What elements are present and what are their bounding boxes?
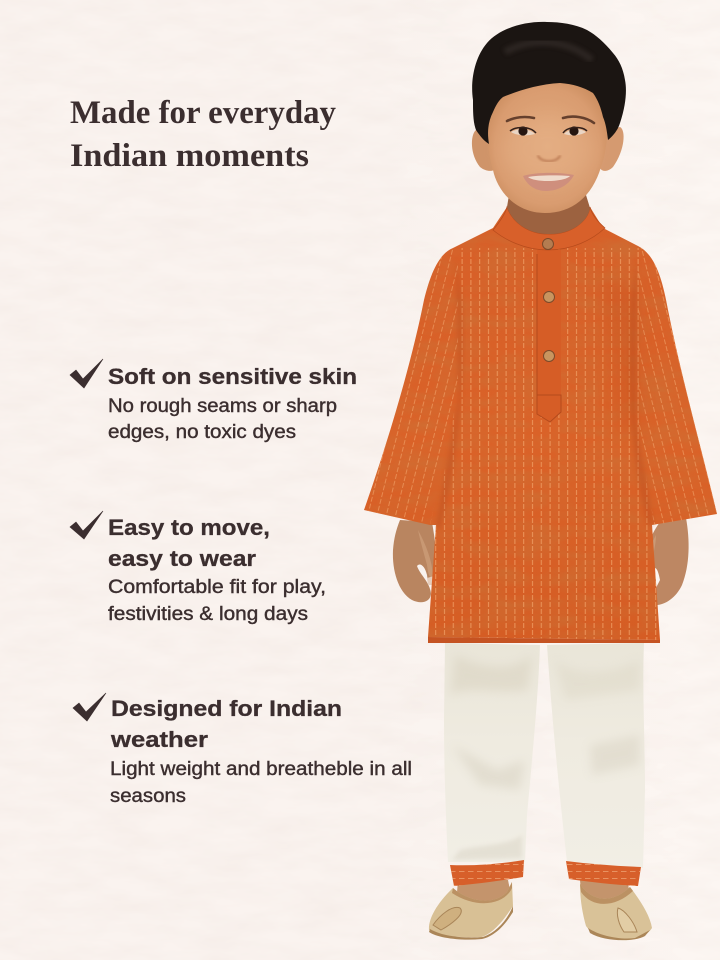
mouth bbox=[523, 173, 574, 191]
ears bbox=[472, 127, 624, 171]
nose bbox=[538, 156, 560, 161]
hands bbox=[393, 518, 689, 605]
benefit: soft on sensitive skin bbox=[70, 359, 357, 443]
benefit: designed for Indian weather: Designed for Indian bbox=[111, 696, 342, 721]
face bbox=[487, 80, 607, 213]
benefit: designed for Indian weather: Light weight and breatheble in all bbox=[110, 759, 412, 780]
hair bbox=[472, 22, 626, 144]
head bbox=[472, 22, 626, 234]
benefit: easy to move: Comfortable fit for play, bbox=[108, 577, 326, 598]
pants bbox=[444, 643, 645, 886]
icon: check mark bbox=[70, 359, 103, 388]
benefit: easy to move bbox=[70, 511, 326, 625]
eyes bbox=[510, 126, 587, 136]
kurta bbox=[364, 207, 717, 643]
benefit: designed for Indian weather: seasons bbox=[110, 786, 186, 807]
shoes bbox=[429, 880, 652, 940]
eyebrows bbox=[507, 117, 594, 123]
pant cuffs bbox=[450, 860, 641, 886]
collar bbox=[493, 207, 605, 250]
heading: Made for everyday bbox=[70, 95, 336, 131]
neck bbox=[507, 195, 590, 234]
benefit: soft on sensitive skin: Soft on sensitive skin bbox=[108, 364, 357, 389]
buttons bbox=[542, 238, 554, 362]
benefit: designed for Indian weather bbox=[73, 693, 412, 807]
benefit: easy to move: Easy to move, bbox=[108, 515, 270, 540]
benefit: easy to move: festivities & long days bbox=[108, 604, 308, 625]
photo: smiling boy in orange kurta bbox=[364, 22, 717, 940]
icon: check mark bbox=[70, 511, 103, 539]
heading: Indian moments bbox=[70, 138, 309, 174]
placket bbox=[537, 250, 561, 422]
benefit: designed for Indian weather: weather bbox=[110, 727, 208, 752]
icon: check mark bbox=[73, 693, 106, 721]
benefit: easy to move: easy to wear bbox=[108, 546, 256, 571]
heading bbox=[70, 95, 336, 174]
benefit: soft on sensitive skin: edges, no toxic dyes bbox=[108, 422, 296, 443]
benefit: soft on sensitive skin: No rough seams or sharp bbox=[108, 396, 337, 417]
